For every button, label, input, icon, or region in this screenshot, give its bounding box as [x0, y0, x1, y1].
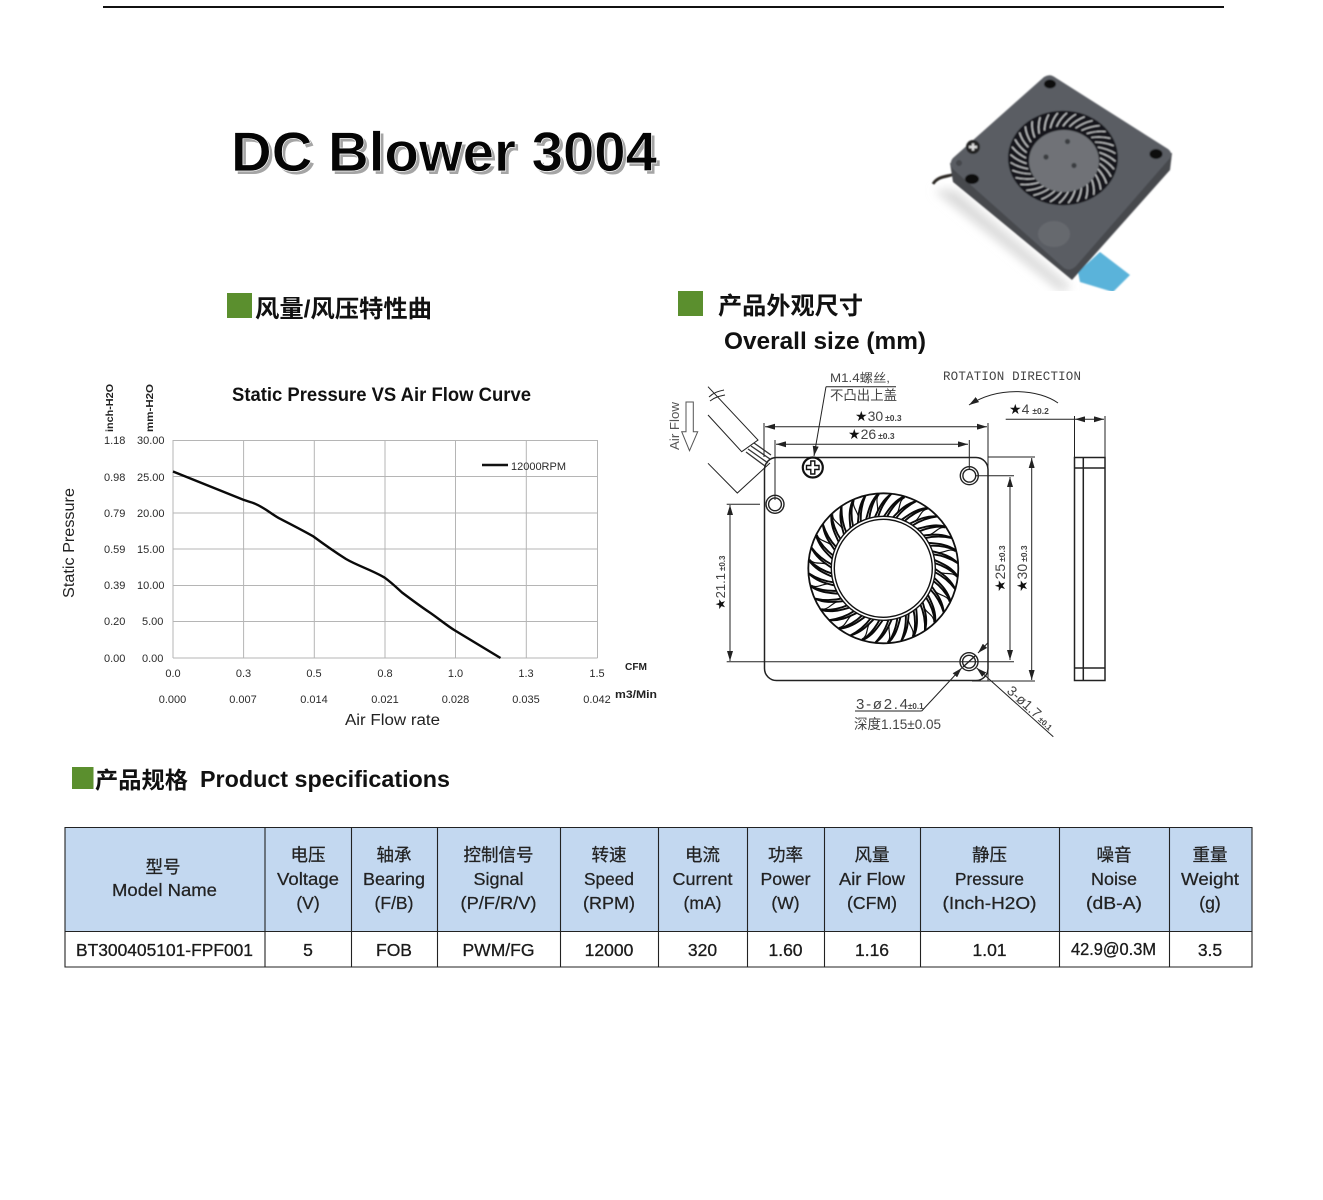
dimension lines — [727, 387, 1105, 737]
hub — [1029, 130, 1099, 192]
y axis labels: 0.39 — [104, 580, 125, 592]
title: DC Blower 3004 — [234, 123, 660, 186]
chart: static pressure vs air flow — [61, 384, 657, 729]
heading: airflow pressure curve: 风量/风压特性曲 — [255, 296, 432, 323]
y axis labels: Static Pressure — [61, 488, 78, 598]
table header: 控制信号 — [464, 845, 534, 865]
table header: Signal — [474, 869, 524, 889]
table header: (F/B) — [375, 893, 413, 913]
y axis labels: 30.00 — [137, 435, 165, 447]
table header: 轴承 — [376, 845, 412, 865]
x axis labels: 0.028 — [442, 694, 469, 706]
fan side wall — [950, 153, 1172, 280]
y axis labels — [61, 384, 165, 665]
table data row: 12000 — [585, 940, 634, 960]
heading: overall size: 产品外观尺寸 — [718, 293, 863, 320]
x axis labels: m3/Min — [615, 689, 657, 701]
table header: (Inch-H2O) — [942, 893, 1036, 913]
dimension text: 3-ø2.4 — [856, 696, 908, 713]
table header: Voltage — [277, 869, 339, 889]
heading: product specifications — [72, 766, 450, 793]
table data row: 1.60 — [768, 940, 803, 960]
table header: (P/F/R/V) — [460, 893, 536, 913]
y axis labels: 0.20 — [104, 616, 125, 628]
dimension text: 深度1.15±0.05 — [854, 716, 941, 732]
table header: 型号 — [146, 857, 180, 877]
table header: Bearing — [363, 869, 425, 889]
wire — [933, 174, 955, 184]
table header: (RPM) — [583, 893, 635, 913]
x axis labels: 0.007 — [229, 694, 257, 706]
x axis labels: 0.8 — [377, 668, 393, 680]
y axis labels: 10.00 — [137, 580, 165, 592]
table header — [112, 845, 1239, 913]
table header: Air Flow — [839, 869, 905, 889]
product photo: blower fan — [933, 75, 1172, 292]
dimension text: 3-ø1.7±0.1 — [1004, 682, 1058, 733]
table header: Speed — [584, 869, 634, 889]
y axis labels: 0.79 — [104, 508, 125, 520]
x axis labels: 1.3 — [518, 668, 534, 680]
table header: (dB-A) — [1086, 893, 1142, 913]
y axis labels: 25.00 — [137, 472, 165, 484]
table data row: 3.5 — [1198, 940, 1222, 960]
table header: (g) — [1199, 893, 1221, 913]
y axis labels: 0.98 — [104, 472, 125, 484]
blue tape — [1078, 252, 1130, 292]
x axis labels: 0.5 — [306, 668, 322, 680]
dimension text: ★26±0.3 — [848, 426, 895, 442]
x axis labels: 0.042 — [583, 694, 611, 706]
heading: product specifications: 产品规格 — [95, 767, 188, 793]
table data row: FOB — [376, 940, 412, 960]
table header: Power — [760, 869, 811, 889]
table data row: 5 — [303, 940, 313, 960]
dimension text: ★21.1±0.3 — [713, 555, 728, 610]
x axis labels: 0.000 — [159, 694, 186, 706]
screw — [803, 458, 823, 478]
chart title: Static Pressure VS Air Flow Curve — [232, 385, 531, 406]
fan top face — [951, 75, 1171, 270]
dimension text: M1.4螺丝, — [830, 371, 890, 385]
dimension text: ±0.1 — [908, 702, 924, 711]
y axis labels: 0.59 — [104, 544, 125, 556]
table header: (V) — [296, 893, 320, 913]
dimension text: 不凸出上盖 — [830, 388, 897, 403]
legend — [482, 461, 566, 473]
legend: 12000RPM — [511, 461, 566, 473]
housing patch — [1038, 221, 1070, 247]
technical drawing: overall dimensions — [668, 370, 1105, 737]
dimension text: ROTATION DIRECTION — [943, 370, 1081, 384]
heading: overall size: Overall size (mm) — [724, 328, 926, 355]
table data row: 320 — [688, 940, 717, 960]
table header: (CFM) — [847, 893, 897, 913]
table data row: 1.01 — [972, 940, 1007, 960]
table header: 转速 — [592, 845, 626, 865]
curve: 12000RPM — [173, 472, 500, 658]
x axis labels: 0.3 — [236, 668, 251, 680]
y axis labels: inch-H2O — [104, 384, 116, 432]
soft shadow — [934, 190, 1072, 291]
table data row: BT300405101-FPF001 — [76, 940, 253, 960]
x axis labels: 0.0 — [165, 668, 181, 680]
table header: (mA) — [684, 893, 721, 913]
x axis labels: Air Flow rate — [345, 712, 440, 729]
x axis labels: 1.0 — [448, 668, 463, 680]
y axis labels: mm-H2O — [144, 384, 156, 432]
y axis labels: 5.00 — [142, 616, 163, 628]
table header: 电流 — [685, 845, 720, 865]
screw — [966, 140, 980, 154]
table header: 功率 — [768, 845, 803, 865]
heading: overall size — [678, 291, 926, 355]
table header: Current — [672, 869, 733, 889]
table header: 重量 — [1192, 845, 1228, 865]
x axis labels: 0.035 — [512, 694, 540, 706]
x axis labels: 1.5 — [589, 668, 605, 680]
x axis labels: 0.021 — [371, 694, 399, 706]
y axis labels: 0.00 — [104, 653, 125, 665]
x axis labels: 0.014 — [300, 694, 328, 706]
y axis labels: 1.18 — [104, 435, 125, 447]
heading: product specifications: Product specifications — [200, 766, 450, 792]
air flow arrow: Air Flow — [668, 401, 682, 450]
table header: (W) — [771, 893, 800, 913]
table data row: 42.9@0.3M — [1071, 939, 1156, 959]
table data row: 1.16 — [855, 940, 889, 960]
x axis labels: CFM — [625, 661, 647, 673]
y axis labels: 20.00 — [137, 508, 165, 520]
rotation direction arrow — [969, 392, 1058, 405]
mounting holes — [766, 467, 978, 671]
impeller — [808, 493, 958, 643]
x axis labels — [159, 661, 657, 729]
air flow arrow — [668, 401, 698, 451]
table header: Weight — [1181, 869, 1239, 889]
side view — [1074, 458, 1105, 680]
fan opening — [1008, 111, 1118, 205]
table header: 风量 — [854, 845, 890, 865]
specifications table — [65, 828, 1252, 967]
dimension text: ★30±0.3 — [855, 408, 902, 424]
table header: Model Name — [112, 880, 217, 900]
title: DC Blower 3004 — [231, 120, 657, 183]
dimension text: ★4 ±0.2 — [1009, 401, 1049, 417]
housing plate — [764, 458, 988, 680]
dimension text: ★30±0.3 — [1014, 545, 1030, 592]
table header: Pressure — [955, 869, 1024, 889]
y axis labels: 0.00 — [142, 653, 163, 665]
dimension text — [713, 370, 1081, 733]
cable — [708, 387, 770, 493]
table data row — [76, 939, 1222, 960]
table header: Noise — [1091, 869, 1137, 889]
mounting holes — [1044, 80, 1056, 88]
y axis labels: 15.00 — [137, 544, 165, 556]
table data row: PWM/FG — [462, 940, 534, 960]
dimension text: ★25±0.3 — [992, 545, 1008, 592]
table header: 电压 — [290, 845, 326, 865]
table header: 噪音 — [1096, 845, 1132, 865]
table header: 静压 — [972, 845, 1007, 865]
